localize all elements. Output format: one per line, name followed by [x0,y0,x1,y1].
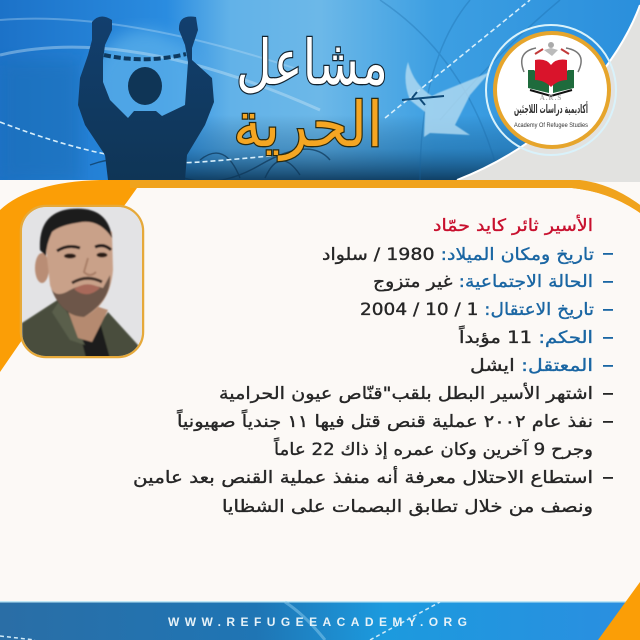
orange footer corner [598,582,640,640]
bullet: detention camp: المعتقل: ايشل [470,356,593,376]
ear [35,253,49,283]
bullet: identification: استطاع الاحتلال معرفة أنه منفذ عملية القنص بعد عامين [133,466,593,488]
dove with olive branch [402,62,490,137]
jacket [22,300,138,356]
brows and eyes [57,246,111,251]
prisoner name heading: الأسير ثائر كايد حمّاد [433,215,593,236]
prisoner photo [21,206,143,358]
orange band and left wedge [0,180,640,372]
nose [84,258,96,275]
icon: open book [522,42,581,96]
grey top-right corner [440,0,640,182]
neck [68,306,108,343]
academy name english: Academy Of Refugee Studies [514,122,589,129]
website url: WWW.REFUGEEACADEMY.ORG [168,615,467,629]
bullet: 2002 operation: نفذ عام ٢٠٠٢ عملية قنص قتل فيها ١١ جندياً صهيونياً [176,408,593,432]
A.R.S: A.R.S [540,94,562,102]
dashed line [0,0,530,163]
mouth [74,284,100,294]
footer bar [0,601,640,640]
title: مشاعل: مشاعل [236,26,388,99]
hair [40,209,112,256]
bullet: marital status: الحالة الاجتماعية: غير متزوج [373,272,593,292]
beard [50,275,110,317]
barbed wire [90,149,330,181]
bullet: 2002 operation [176,408,613,460]
header banner [0,0,640,182]
bullet: nickname: اشتهر الأسير البطل بلقب"قنّاص عيون الحرامية [219,383,593,404]
academy logo [486,25,616,155]
face [44,218,113,317]
bullet: birth date and place: تاريخ ومكان الميلاد: 1980 / سلواد [322,245,594,265]
bullet: identification: ونصف من خلال تطابق البصمات على الشظايا [222,497,593,517]
bullet: arrest date: تاريخ الاعتقال: 1 / 10 / 2004 [360,300,594,320]
chain [104,54,186,59]
title: الحرية: الحرية [233,88,383,161]
bullet: identification [133,466,613,517]
white curve edge [457,5,640,180]
bullet: 2002 operation: وجرح 9 آخرين وكان عمره إذ ذاك 22 عاماً [273,436,593,460]
silhouette of prisoner with chained hands [78,16,214,180]
bullet: sentence: الحكم: 11 مؤبداً [458,324,593,348]
